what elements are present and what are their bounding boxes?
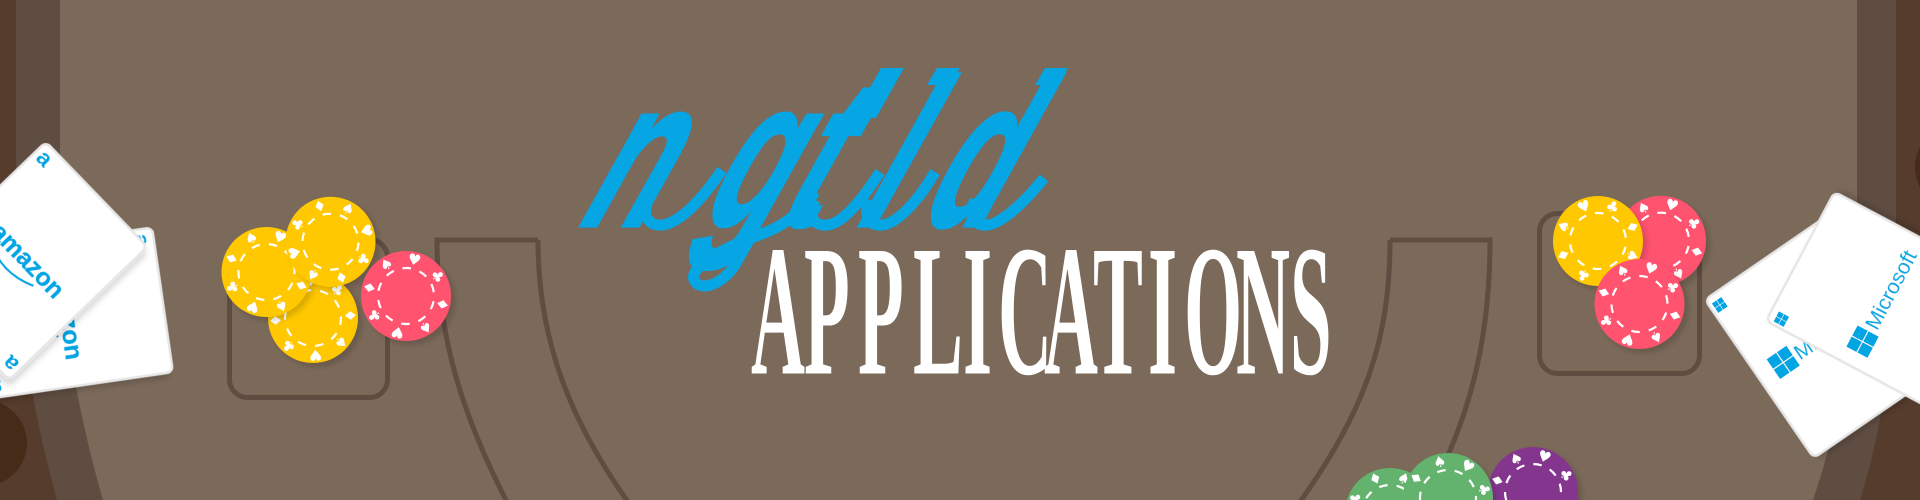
chip: pink right front: ♥: [1619, 329, 1637, 350]
chip: pink left: ♦: [432, 296, 452, 313]
card: amazon front: a: [31, 144, 59, 172]
chip: yellow left: ♦: [290, 276, 312, 295]
chip: pink right front: ♣: [1661, 277, 1684, 297]
chip: yellow lower: ♥: [308, 345, 323, 364]
chip: pink right back: ♦: [1615, 221, 1636, 239]
chip: yellow top: ♦: [311, 196, 329, 217]
chip: yellow top: ♣: [287, 214, 309, 234]
chip: pink right front: ♦: [1594, 283, 1615, 302]
chip: purple bottom: ♦: [1487, 471, 1508, 490]
chip: pink left: ♣: [426, 266, 449, 287]
card: microsoft front: [1766, 192, 1920, 411]
chip: yellow left: ♥: [244, 296, 263, 317]
card: amazon back: a: [128, 232, 156, 249]
chip: purple bottom: [1487, 446, 1578, 500]
chip: yellow left: ♣: [222, 277, 244, 297]
chip: purple bottom: ♣: [1555, 465, 1577, 485]
chip: purple bottom: ♠: [1506, 448, 1526, 470]
chip: yellow lower: ♣: [278, 335, 300, 357]
title: APPLICATIONS: APPLICATIONS: [751, 207, 1332, 414]
chip: yellow lower: [267, 272, 359, 364]
chip: pink right back: ♠: [1668, 262, 1689, 284]
chip: yellow right: ♥: [1602, 264, 1621, 286]
chip: green right: ♠: [1431, 452, 1448, 472]
chip: yellow top: ♠: [303, 263, 323, 285]
title: ngtld: ngtld: [558, 37, 1081, 272]
betting box: right: [1540, 214, 1700, 374]
chip: yellow lower: ♠: [274, 283, 296, 305]
chip: yellow left: ♦: [221, 249, 243, 268]
card: microsoft back: Microsoft: [1790, 297, 1874, 365]
chip: pink left: [360, 250, 452, 342]
chip: yellow top: ♥: [355, 222, 376, 240]
chip: green left: ♠: [1394, 468, 1413, 490]
chip: green left: ♦: [1366, 468, 1385, 490]
chip: green right: ♣: [1474, 481, 1494, 498]
chip: yellow lower: ♥: [303, 272, 318, 291]
chip: pink right front: ♣: [1595, 311, 1618, 331]
card: microsoft front: Microsoft: [1861, 247, 1920, 334]
chip: pink left: ♦: [360, 279, 380, 296]
chip: yellow top: ♦: [332, 267, 350, 288]
chip: yellow right: ♥: [1575, 196, 1594, 218]
chip: yellow right: ♦: [1621, 218, 1643, 237]
chip: yellow lower: ♦: [267, 313, 286, 328]
chip: yellow right: ♦: [1553, 245, 1575, 264]
chip: pink right back: ♥: [1663, 195, 1681, 216]
chip: green right: [1403, 452, 1494, 500]
chip: pink left: ♥: [406, 250, 423, 270]
chip: yellow lower: ♠: [330, 331, 352, 353]
card: microsoft back: [1705, 217, 1920, 458]
chip: pink right back: ♣: [1617, 248, 1639, 268]
chip: yellow right: ♠: [1553, 217, 1575, 236]
card: amazon front: [0, 141, 148, 381]
chip: yellow right: [1553, 196, 1643, 286]
chip: pink right front: ♦: [1664, 306, 1685, 325]
chip: green left: [1345, 468, 1435, 500]
card: amazon back: amazon: [47, 265, 88, 362]
chip: purple bottom: ♥: [1535, 446, 1554, 467]
chip: pink left: ♠: [376, 253, 397, 276]
chip: pink right back: [1615, 195, 1707, 287]
chip: yellow left: ♠: [272, 295, 291, 317]
chip: pink right front: ♥: [1642, 258, 1660, 279]
chip: yellow top: ♠: [338, 198, 358, 220]
chip: yellow left: ♥: [270, 227, 289, 248]
chip: yellow lower: ♦: [340, 308, 359, 323]
chip: yellow right: ♣: [1574, 264, 1593, 286]
chip: pink right front: ♠: [1613, 260, 1633, 282]
chip: pink left: ♣: [363, 305, 386, 326]
chip: pink right front: [1594, 258, 1685, 350]
chip: yellow right: ♠: [1621, 246, 1643, 265]
chip: yellow left: ♣: [289, 247, 311, 267]
chip: pink right back: ♥: [1641, 266, 1659, 287]
betting arc: left: [434, 240, 628, 500]
chip: yellow left: [221, 227, 312, 317]
chip: pink right back: ♠: [1633, 197, 1654, 219]
chip: pink right back: ♦: [1686, 242, 1707, 261]
betting box: left: [230, 240, 388, 398]
chip: yellow top: ♣: [352, 249, 374, 269]
chip: pink right front: ♠: [1646, 326, 1666, 348]
chip: yellow top: ♥: [285, 243, 306, 262]
chip: yellow lower: ♣: [326, 279, 348, 301]
chip: green right: ♥: [1457, 455, 1478, 478]
chip: green right: ♦: [1405, 468, 1428, 489]
chip: pink left: ♥: [389, 322, 406, 342]
chip: pink left: ♠: [415, 316, 436, 339]
chip: yellow left: ♠: [242, 227, 261, 249]
chip: pink right back: ♣: [1683, 213, 1705, 233]
betting arc: right: [1300, 240, 1492, 500]
card: amazon back: [0, 227, 174, 400]
chip: yellow right: ♣: [1603, 196, 1622, 218]
chip: yellow top: [285, 196, 376, 288]
